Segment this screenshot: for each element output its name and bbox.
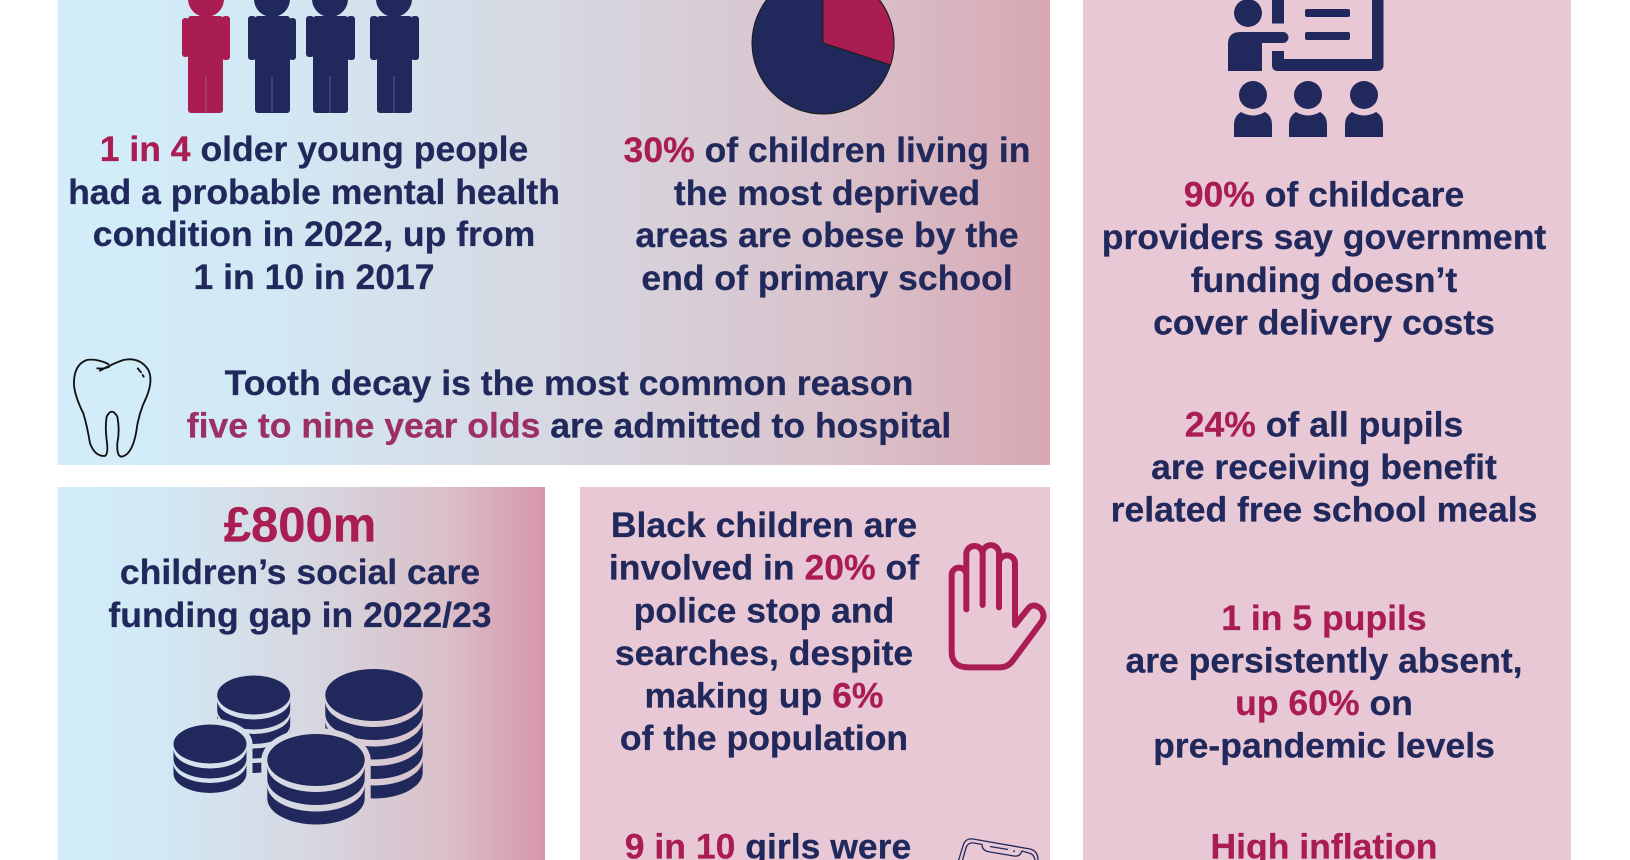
text: persistent absence statistic: pre-pandemic levels [1153, 726, 1495, 766]
panel: stop and search and online harassment [580, 487, 1050, 860]
text: mental health statistic: had a probable mental health [68, 172, 560, 212]
text: tooth decay statistic: five to nine year olds are admitted to hospital [187, 406, 951, 446]
text: stop and search statistic [609, 505, 919, 758]
text: free school meals statistic: related free school meals [1111, 490, 1537, 530]
text: childcare funding statistic: funding doesn’t [1191, 260, 1457, 300]
text: obesity statistic [624, 130, 1030, 298]
text: persistent absence statistic: up 60% on [1235, 683, 1413, 723]
text: obesity statistic: areas are obese by the [635, 215, 1019, 255]
text: mental health statistic: condition in 2022, up from [93, 214, 535, 254]
icon: raised hand [952, 545, 1043, 667]
panel: social care funding gap [58, 487, 545, 860]
text: mental health statistic: 1 in 10 in 2017 [193, 257, 435, 297]
text: funding gap description: funding gap in 2022/23 [108, 595, 492, 635]
heading: 800 million: £800m [224, 498, 376, 552]
icon: coin stacks [168, 669, 423, 830]
panel: childcare, school meals, absence and inflation [1083, 0, 1571, 860]
icon: tooth [74, 359, 150, 457]
text: stop and search statistic: making up 6% [644, 676, 884, 716]
text: stop and search statistic: police stop and [634, 590, 894, 630]
text: childcare funding statistic: 90% of childcare [1184, 174, 1464, 214]
text: funding gap description: children’s social care [120, 552, 480, 592]
text: mental health statistic: 1 in 4 older young people [100, 129, 528, 169]
text: stop and search statistic: of the population [620, 718, 908, 758]
text: persistent absence statistic [1125, 598, 1523, 766]
text: free school meals statistic [1111, 404, 1537, 530]
text: tooth decay statistic [187, 363, 951, 446]
icon: teacher and pupils at a board [1228, 0, 1384, 137]
text: childcare funding statistic: cover delivery costs [1153, 302, 1495, 342]
panel: mental health, obesity and tooth decay [58, 0, 1050, 465]
icon: smartphone [958, 839, 1038, 860]
icon: four people, one highlighted [182, 0, 419, 113]
text: free school meals statistic: 24% of all pupils [1185, 404, 1463, 444]
text: stop and search statistic: involved in 20% of [609, 548, 919, 588]
text: obesity statistic: 30% of children living in [624, 130, 1030, 170]
text: stop and search statistic: searches, despite [615, 633, 913, 673]
text: mental health statistic [68, 129, 560, 297]
text: persistent absence statistic: 1 in 5 pupils [1221, 598, 1427, 638]
text: obesity statistic: end of primary school [641, 258, 1013, 298]
text: persistent absence statistic: are persistently absent, [1125, 640, 1523, 680]
text: childcare funding statistic: providers say government [1102, 217, 1546, 257]
pie chart: 30 percent obese [752, 0, 894, 114]
text: free school meals statistic: are receiving benefit [1151, 447, 1497, 487]
text: funding gap description [108, 552, 492, 635]
text: stop and search statistic: Black children are [611, 505, 917, 545]
text: tooth decay statistic: Tooth decay is the most common reason [225, 363, 913, 403]
text: obesity statistic: the most deprived [674, 173, 980, 213]
text: childcare funding statistic [1102, 174, 1546, 342]
